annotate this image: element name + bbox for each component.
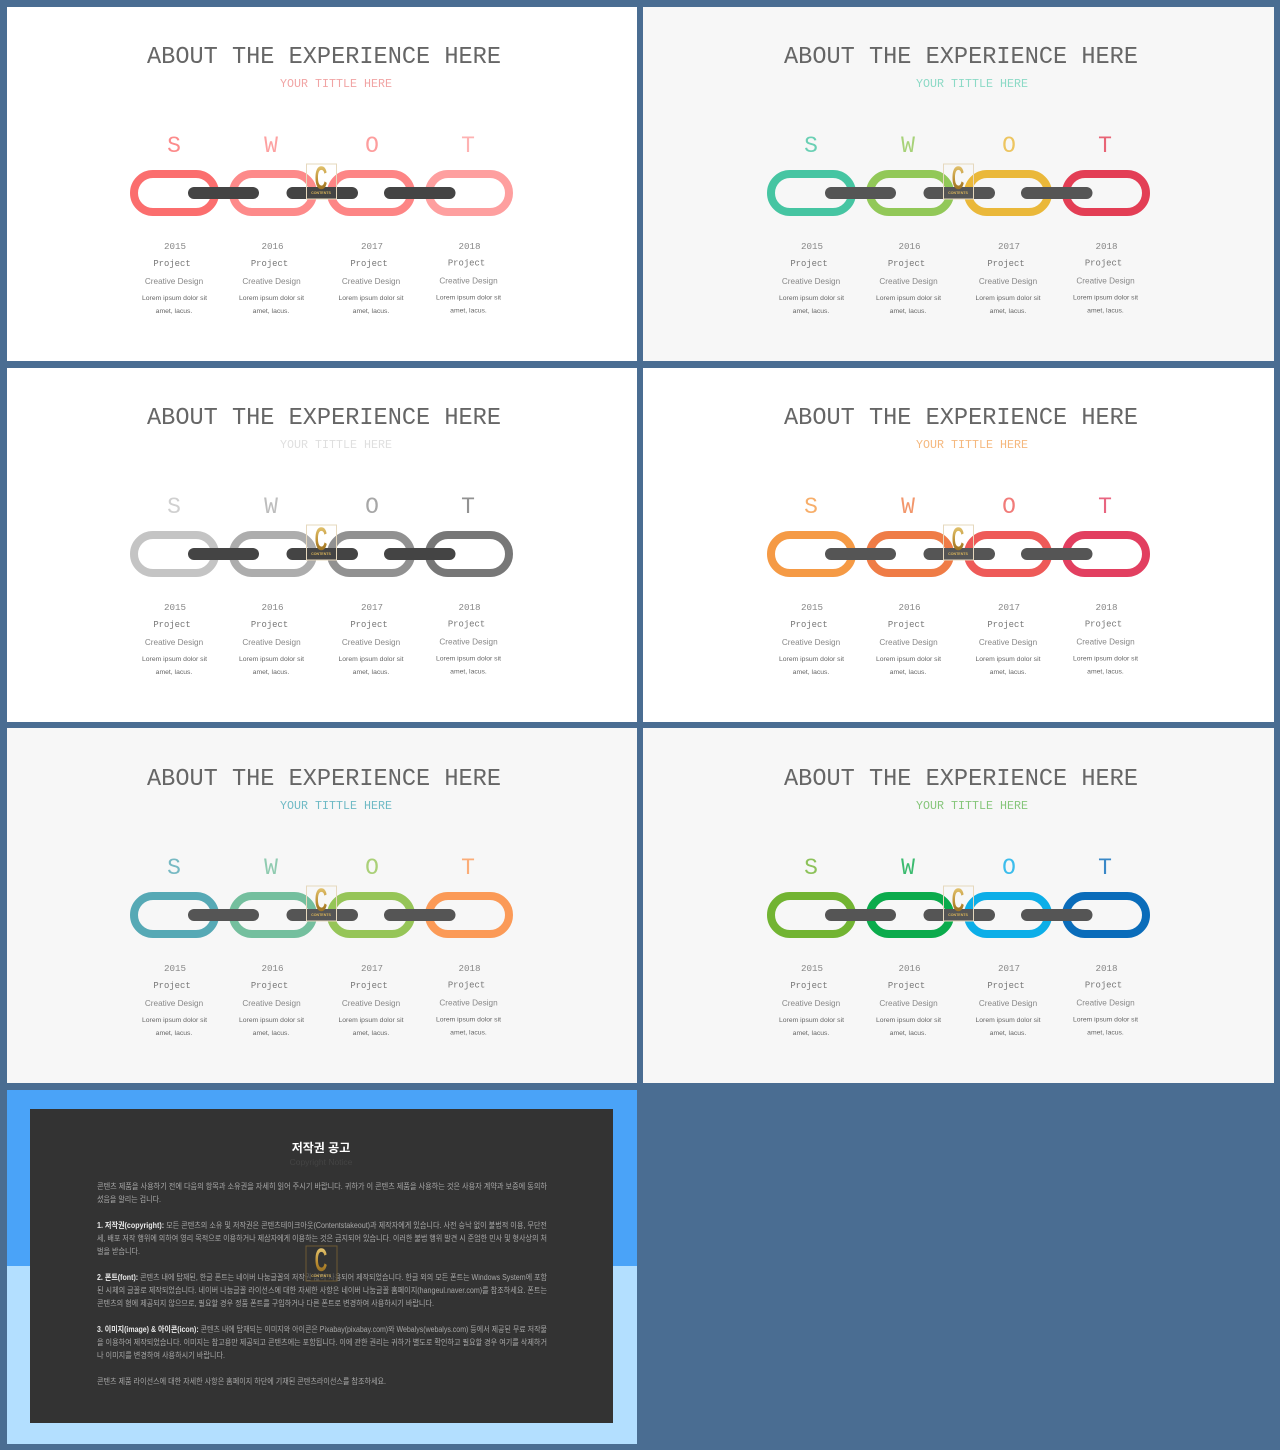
column 2016: Creative Design [242,999,301,1008]
column 2018: amet, lacus. [1087,308,1124,314]
column 2015: Project [790,981,828,991]
column 2016: 2016 [261,963,284,974]
column 2017: 2017 [998,241,1020,252]
watermark logo: C [315,1241,327,1278]
copyright paragraph [97,1220,547,1256]
column 2018: Project [1085,258,1122,268]
letter S: S [167,855,181,881]
column 2017: Creative Design [342,277,401,286]
column 2017: Project [350,620,388,630]
column 2016: Creative Design [879,277,938,286]
column 2018: Lorem ipsum dolor sit [436,294,501,302]
chain link 1 [771,174,852,212]
closing line: 콘텐츠 제품 라이선스에 대한 자세한 사항은 홈페이지 하단에 기재된 콘텐츠라이선스를 참조하세요. [97,1376,386,1386]
column 2016 [239,963,304,1037]
intro paragraph: 셨음을 알리는 겁니다. [97,1194,161,1204]
column 2015: Project [153,981,191,991]
column 2017: 2017 [361,241,383,252]
chain link 1 [134,896,215,934]
column 2018: Creative Design [1076,276,1135,286]
column 2015: Creative Design [782,277,841,286]
chain link 1 [134,174,215,212]
column 2018 [436,241,501,314]
letter O: O [365,133,379,159]
column 2018: Lorem ipsum dolor sit [1073,294,1138,302]
column 2016: amet, lacus. [890,669,926,676]
column 2018: amet, lacus. [450,668,487,676]
column 2017: amet, lacus. [353,308,389,315]
letter S: S [804,494,818,520]
column 2018: Project [1085,980,1122,990]
chain link 3 [968,174,1048,212]
column 2015: Lorem ipsum dolor sit [779,656,844,663]
column 2015: 2015 [164,963,186,974]
image and icon paragraph: 을 이용하여 제작되었습니다. 이미지는 참고용만 제공되고 콘텐츠에는 포함됩니다. 이에 관한 권리는 귀하가 별도로 확인하고 필요할 경우 여기를 삭제하거 [97,1337,547,1347]
column 2017: amet, lacus. [353,669,389,676]
column 2016: 2016 [261,602,284,613]
subtitle: YOUR TITTLE HERE [280,77,392,91]
column 2017: Project [350,981,388,991]
column 2015: Creative Design [145,999,204,1008]
watermark logo: C [315,881,327,918]
letter O: O [365,494,379,520]
watermark logo [944,520,974,560]
column 2015: Project [790,620,828,630]
column 2017: Lorem ipsum dolor sit [976,295,1041,302]
subtitle: YOUR TITTLE HERE [280,799,392,813]
image and icon paragraph: 나 이미지를 변경하여 사용하시기 바랍니다. [97,1350,225,1360]
letter S: S [804,133,818,159]
letter O: O [1002,494,1016,520]
watermark logo: C [315,159,327,196]
watermark logo: CONTENTS [311,552,331,556]
letter W: W [264,494,278,520]
chain link 2 [870,174,950,212]
column 2017 [976,602,1041,676]
column 2016: 2016 [898,602,921,613]
copyright paragraph: 1. 저작권(copyright): 모든 콘텐츠의 소유 및 저작권은 콘텐츠테이크아웃(Contentstakeout)과 제작자에게 있습니다. 사전 승낙 없이 불법적 이용, 무단전 [97,1220,547,1230]
column 2017 [339,602,404,676]
column 2018: Project [1085,620,1122,630]
column 2018: Lorem ipsum dolor sit [1073,1016,1138,1024]
column 2018: Project [448,258,485,268]
letter W: W [901,855,915,881]
letter O: O [1002,133,1016,159]
letter T: T [1098,133,1112,159]
panel: green and blue SWOT slide [643,728,1274,1083]
column 2015: amet, lacus. [156,308,192,315]
chain link 2 [233,174,313,212]
column 2016: Lorem ipsum dolor sit [239,295,304,302]
column 2015 [779,602,844,676]
letter S: S [167,494,181,520]
panel: orange SWOT slide [643,368,1274,722]
column 2015: 2015 [801,602,823,613]
title: ABOUT THE EXPERIENCE HERE [784,44,1138,71]
chain link 3 [968,896,1048,934]
watermark logo: CONTENTS [948,191,968,195]
column 2015: amet, lacus. [156,669,192,676]
letter T: T [461,855,475,881]
column 2018: amet, lacus. [1087,668,1124,676]
font paragraph: 콘텐츠의 혐에 제공되지 않으므로, 필요할 경우 정품 폰트를 구입하거나 다른 폰트로 변경하여 사용하시기 바랍니다. [97,1298,434,1308]
subtitle: YOUR TITTLE HERE [916,77,1028,91]
column 2016: Lorem ipsum dolor sit [239,1017,304,1024]
column 2016: amet, lacus. [890,308,926,315]
column 2018: Lorem ipsum dolor sit [436,1016,501,1024]
column 2017: 2017 [998,602,1020,613]
column 2015: 2015 [801,241,823,252]
letter W: W [264,855,278,881]
letter O: O [1002,855,1016,881]
subtitle: YOUR TITTLE HERE [280,438,392,452]
column 2015: Creative Design [782,999,841,1008]
column 2015: amet, lacus. [793,1030,829,1037]
subtitle: YOUR TITTLE HERE [916,799,1028,813]
letter S: S [167,133,181,159]
intro paragraph: 콘텐츠 제품을 사용하기 전에 다음의 항목과 소유권을 자세히 읽어 주시기 바랍니다. 귀하가 이 콘텐츠 제품을 사용하는 것은 사용자 계약과 보증에 동의하 [97,1181,548,1191]
font paragraph: 된 시체의 글꼴로 제작되었습니다. 네이버 나눔글꼴 라이선스에 대한 자세한 사항은 네이버 나눔글꼴 홈페이지(hangeul.naver.com)를 참조하세요. 폰트는 [97,1285,547,1295]
letter W: W [264,133,278,159]
chain connectors [188,548,456,560]
watermark logo [306,520,336,560]
subtitle: YOUR TITTLE HERE [916,438,1028,452]
column 2017: Creative Design [979,277,1038,286]
watermark logo: C [952,881,964,918]
column 2018 [1073,241,1138,314]
column 2017: Project [987,620,1025,630]
watermark logo: CONTENTS [948,552,968,556]
column 2015: Creative Design [782,638,841,647]
column 2017 [339,241,404,315]
chain link 3 [331,535,411,573]
column 2015: 2015 [164,602,186,613]
panel: copyright notice slide [7,1090,637,1444]
column 2016: Creative Design [242,638,301,647]
column 2017: Lorem ipsum dolor sit [339,295,404,302]
column 2015: Lorem ipsum dolor sit [142,295,207,302]
column 2016: 2016 [898,963,921,974]
column 2015: Lorem ipsum dolor sit [142,1017,207,1024]
column 2017: 2017 [998,963,1020,974]
column 2017: amet, lacus. [990,308,1026,315]
letter T: T [461,133,475,159]
chain link 4 [429,896,509,934]
column 2017: Project [350,259,388,269]
font paragraph [97,1272,548,1308]
watermark logo: CONTENTS [311,191,331,195]
column 2015: Lorem ipsum dolor sit [779,1017,844,1024]
column 2015: Creative Design [145,277,204,286]
title: ABOUT THE EXPERIENCE HERE [147,44,501,71]
column 2018: amet, lacus. [450,1030,487,1036]
column 2018: Lorem ipsum dolor sit [1073,656,1138,662]
column 2018: amet, lacus. [1087,1030,1124,1036]
title: ABOUT THE EXPERIENCE HERE [147,405,501,432]
watermark logo [944,159,974,199]
column 2016: Project [251,981,288,991]
title: ABOUT THE EXPERIENCE HERE [147,766,501,793]
column 2016 [239,241,304,315]
letter W: W [901,494,915,520]
column 2016: Project [888,981,925,991]
column 2018: Lorem ipsum dolor sit [436,656,501,662]
column 2016: Project [888,620,925,630]
watermark logo: C [315,520,327,557]
column 2018: Creative Design [1076,998,1135,1008]
watermark logo: C [952,159,964,196]
column 2018: 2018 [458,602,481,613]
column 2016: amet, lacus. [890,1030,926,1037]
column 2018 [1073,963,1138,1036]
chain connectors [188,909,456,921]
chain link 1 [134,535,215,573]
column 2015: Creative Design [145,638,204,647]
column 2017: Creative Design [342,999,401,1008]
column 2015 [779,963,844,1037]
letter O: O [365,855,379,881]
chain link 2 [233,535,313,573]
column 2016: Project [251,259,288,269]
title: ABOUT THE EXPERIENCE HERE [784,766,1138,793]
column 2017 [976,963,1041,1037]
chain link 3 [968,535,1048,573]
chain link 3 [331,174,411,212]
column 2017: Creative Design [342,638,401,647]
image and icon paragraph [97,1324,547,1360]
watermark logo [944,881,974,921]
column 2017 [339,963,404,1037]
column 2015: Project [790,259,828,269]
chain link 4 [429,535,509,573]
chain connectors [825,548,1092,560]
column 2015: Lorem ipsum dolor sit [779,295,844,302]
panel: multicolour SWOT slide [643,7,1274,361]
letter W: W [901,133,915,159]
column 2016: amet, lacus. [253,669,289,676]
column 2015: amet, lacus. [793,308,829,315]
watermark logo [306,159,336,199]
letter T: T [1098,494,1112,520]
column 2017: Creative Design [979,999,1038,1008]
column 2018 [1073,602,1138,676]
notice heading: 저작권 공고 [292,1140,350,1155]
column 2016: Lorem ipsum dolor sit [876,1017,941,1024]
watermark logo: C [952,520,964,557]
column 2015 [779,241,844,315]
chain link 4 [1066,896,1146,934]
column 2015 [142,241,207,315]
column 2015: amet, lacus. [793,669,829,676]
letter T: T [1098,855,1112,881]
chain link 1 [771,535,852,573]
watermark logo: CONTENTS [948,913,968,917]
column 2017: Project [987,259,1025,269]
column 2015: Project [153,620,191,630]
column 2017: 2017 [361,963,383,974]
column 2016: 2016 [898,241,921,252]
watermark logo: CONTENTS [311,913,331,917]
column 2017: Lorem ipsum dolor sit [976,656,1041,663]
column 2016: amet, lacus. [253,1030,289,1037]
column 2017: Project [987,981,1025,991]
column 2018: 2018 [1095,963,1118,974]
column 2015 [142,602,207,676]
column 2016: amet, lacus. [253,308,289,315]
chain link 3 [331,896,411,934]
column 2015: 2015 [164,241,186,252]
chain link 1 [771,896,852,934]
chain link 4 [1066,174,1146,212]
column 2016: Creative Design [879,999,938,1008]
letter T: T [461,494,475,520]
copyright paragraph: 세, 배포 저작 행위에 의하여 영리 목적으로 이용하거나 제삼자에게 이용하는 것은 금지되어 있습니다. 이러한 불법 행위 발견 시 준엄한 민사 및 형사상의 처 [97,1233,547,1243]
copyright paragraph: 벌을 받습니다. [97,1246,140,1256]
panel: grey SWOT slide [7,368,637,722]
column 2016: Lorem ipsum dolor sit [876,656,941,663]
column 2015: Lorem ipsum dolor sit [142,656,207,663]
column 2016: Project [251,620,288,630]
column 2018: amet, lacus. [450,308,487,314]
column 2017: Lorem ipsum dolor sit [339,1017,404,1024]
column 2018: 2018 [1095,241,1118,252]
column 2015 [142,963,207,1037]
column 2017: 2017 [361,602,383,613]
column 2017: Lorem ipsum dolor sit [339,656,404,663]
chain connectors [188,187,456,199]
watermark logo [306,1241,337,1281]
letter S: S [804,855,818,881]
column 2018: Creative Design [439,998,498,1008]
chain link 2 [233,896,313,934]
font paragraph: 2. 폰트(font): 콘텐츠 내에 탑재된, 한글 폰트는 네이버 나눔글꼴의 저작권 없이 사용되어 제작되었습니다. 한글 외의 모든 폰트는 Windows System에 포함 [97,1272,548,1282]
watermark logo [306,881,336,921]
panel: teal SWOT slide [7,728,637,1083]
column 2018: 2018 [1095,602,1118,613]
column 2018: Creative Design [1076,638,1135,646]
column 2018 [436,602,501,676]
column 2018: Project [448,620,485,630]
column 2017 [976,241,1041,315]
column 2015: 2015 [801,963,823,974]
column 2016 [876,602,941,676]
column 2016: 2016 [261,241,284,252]
column 2015: Project [153,259,191,269]
column 2018: Project [448,980,485,990]
notice subheading: Copyright Notice [290,1157,353,1167]
chain connectors [825,187,1092,199]
chain link 2 [870,535,950,573]
column 2017: amet, lacus. [990,1030,1026,1037]
column 2016 [876,963,941,1037]
chain connectors [825,909,1092,921]
intro paragraph [97,1181,548,1204]
column 2018: 2018 [458,241,481,252]
column 2017: Lorem ipsum dolor sit [976,1017,1041,1024]
image and icon paragraph: 3. 이미지(image) & 아이콘(icon): 콘텐츠 내에 탑재되는 이미지와 아이콘은 Pixabay(pixabay.com)와 Webalys(webalys.com) 등에서 제공된 무료 저작물 [97,1324,547,1334]
panel: red SWOT slide [7,7,637,361]
column 2016: Lorem ipsum dolor sit [876,295,941,302]
column 2016 [876,241,941,315]
column 2018 [436,963,501,1036]
column 2016: Creative Design [879,638,938,647]
chain link 2 [870,896,950,934]
column 2016: Lorem ipsum dolor sit [239,656,304,663]
column 2016: Creative Design [242,277,301,286]
column 2017: amet, lacus. [990,669,1026,676]
watermark logo: CONTENTS [311,1274,331,1278]
column 2017: amet, lacus. [353,1030,389,1037]
column 2016 [239,602,304,676]
chain link 4 [429,174,509,212]
chain link 4 [1066,535,1146,573]
title: ABOUT THE EXPERIENCE HERE [784,405,1138,432]
column 2018: Creative Design [439,276,498,286]
column 2018: 2018 [458,963,481,974]
column 2016: Project [888,259,925,269]
column 2015: amet, lacus. [156,1030,192,1037]
column 2017: Creative Design [979,638,1038,647]
column 2018: Creative Design [439,638,498,646]
